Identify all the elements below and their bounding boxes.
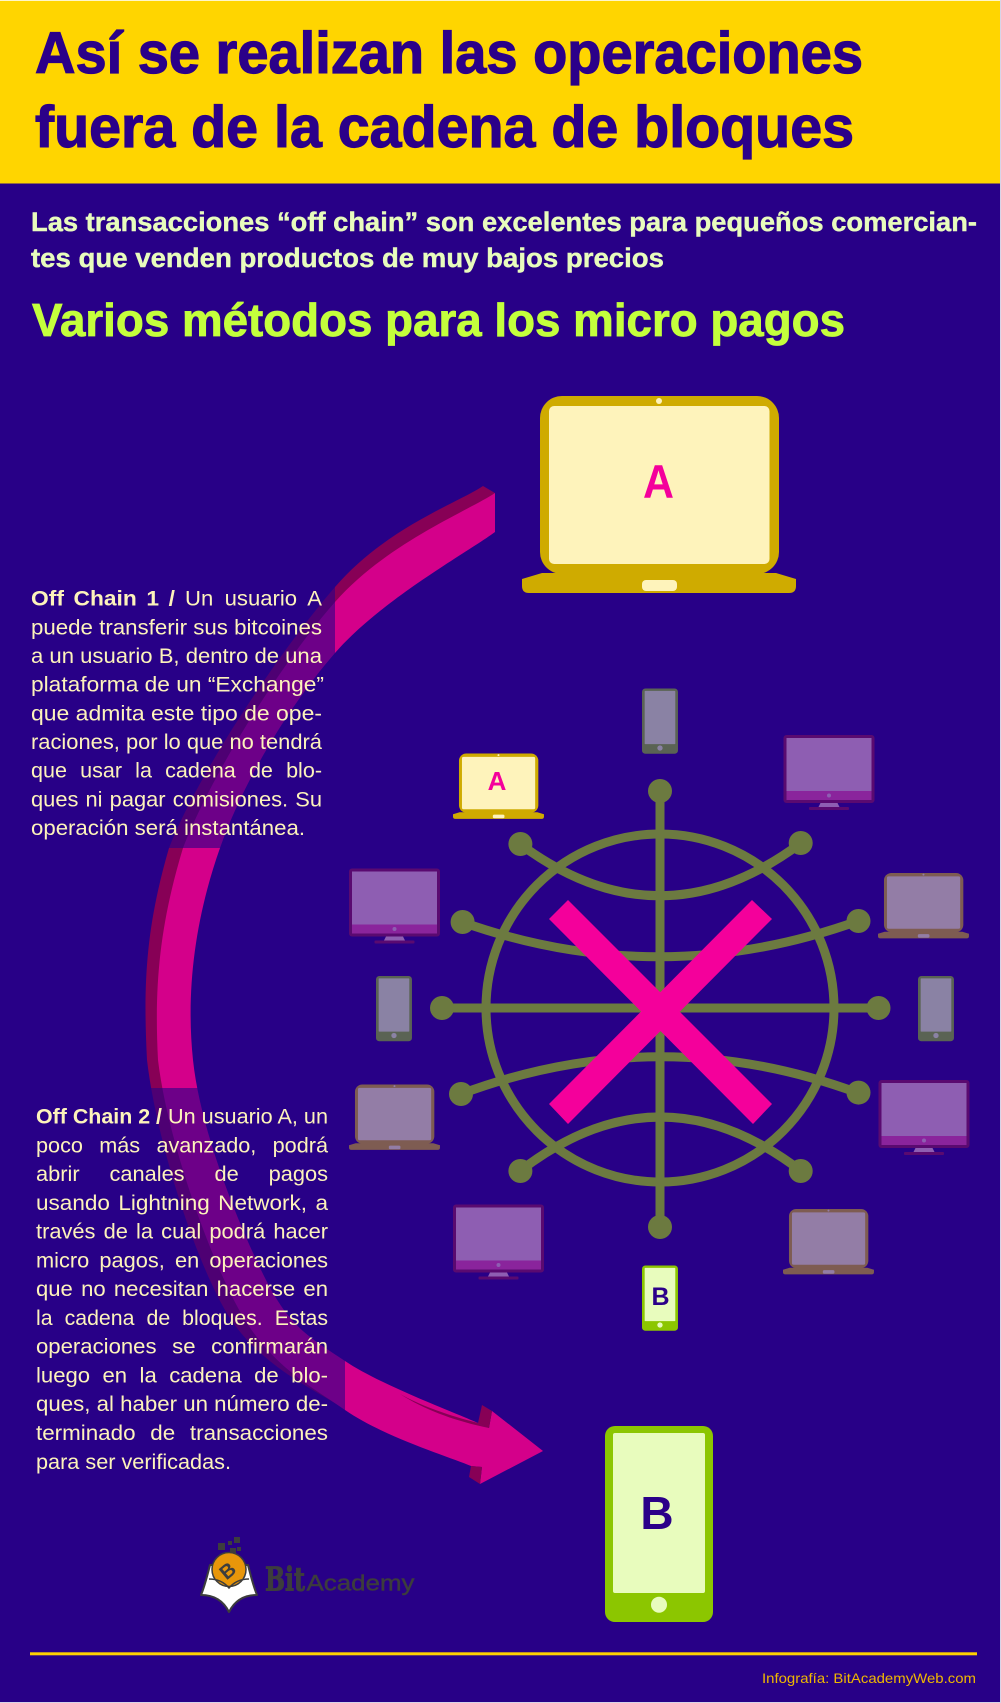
footer credit: Infografía: BitAcademyWeb.com [762, 1670, 976, 1686]
translucent panel behind text 2 [0, 1088, 345, 1428]
icon: large phone B [605, 1426, 713, 1622]
intro text [31, 207, 977, 273]
intro text: tes que venden productos de muy bajos precios [31, 243, 664, 273]
text block: Off Chain 2: ques, al haber un número de- [36, 1393, 328, 1416]
intro text: Las transacciones “off chain” son excelentes para pequeños comercian- [31, 207, 977, 237]
text block: Off Chain 1: raciones, por lo que no tendrá [31, 731, 322, 754]
text block: Off Chain 1: Un usuario A [185, 588, 322, 611]
logo: BitAcademy [201, 1537, 414, 1612]
icon: phone right [918, 976, 954, 1041]
text block: Off Chain 2: terminado de transacciones [36, 1422, 328, 1445]
text block: Off Chain 2: usando Lightning Network, a [36, 1192, 328, 1215]
text block: Off Chain 1: ques ni pagar comisiones. Su [31, 788, 322, 811]
text block: Off Chain 1: que admita este tipo de ope- [31, 702, 322, 725]
title: fuera de la cadena de bloques [35, 95, 854, 160]
logo wordmark: Academy [306, 1571, 414, 1596]
text block: Off Chain 1 [31, 588, 324, 840]
header band [0, 0, 1001, 184]
text block: Off Chain 2: micro pagos, en operaciones [36, 1249, 328, 1272]
icon: monitor top right [784, 735, 874, 810]
title: Así se realizan las operaciones [35, 21, 863, 86]
text block: Off Chain 1: Off Chain 1 / [31, 588, 175, 611]
title [35, 21, 863, 160]
translucent panel behind text 1 [0, 560, 335, 848]
text block: Off Chain 2: operaciones se confirmarán [36, 1336, 328, 1359]
text block: Off Chain 1: a un usuario B, dentro de una [31, 645, 322, 668]
icon: small laptop A: A [488, 766, 507, 796]
footer rule [30, 1652, 977, 1655]
text block: Off Chain 2: poco más avanzado, podrá [36, 1134, 328, 1157]
text block: Off Chain 1: plataforma de un “Exchange” [31, 674, 324, 697]
text block: Off Chain 2: la cadena de bloques. Estas [36, 1307, 328, 1330]
text block: Off Chain 2: que no necesitan hacerse en [36, 1278, 328, 1301]
text block: Off Chain 2: Un usuario A, un [168, 1106, 328, 1128]
icon: pixel squares [218, 1537, 241, 1553]
icon: phone top [642, 688, 678, 754]
icon: pink cross [549, 900, 772, 1124]
arrow: curved path from A to B [146, 486, 543, 1484]
icon: book and coin [201, 1552, 257, 1612]
text block: Off Chain 2: Off Chain 2 / [36, 1106, 162, 1128]
icon: monitor bottom left [453, 1204, 544, 1280]
subheading: Varios métodos para los micro pagos [32, 294, 845, 346]
icon: laptop left lower [349, 1084, 440, 1150]
logo wordmark [265, 1560, 414, 1599]
icon: monitor lower right [878, 1080, 970, 1155]
icon: book and coin: B [216, 1558, 241, 1584]
logo wordmark: Bit [265, 1560, 306, 1599]
text block: Off Chain 2 [36, 1106, 328, 1474]
text block: Off Chain 1: operación será instantánea. [31, 817, 305, 840]
icon: small phone B: B [651, 1283, 670, 1311]
globe network [430, 779, 890, 1239]
icon: small phone B [642, 1266, 678, 1331]
text block: Off Chain 2: través de la cual podrá hacer [36, 1221, 328, 1244]
text block: Off Chain 1: puede transferir sus bitcoines [31, 616, 322, 639]
icon: laptop bottom right [783, 1209, 874, 1274]
icon: laptop right [878, 873, 969, 938]
icon: small laptop A [453, 754, 544, 819]
text block: Off Chain 2: luego en la cadena de blo- [36, 1364, 328, 1387]
icon: phone left [376, 976, 412, 1041]
text block: Off Chain 1: que usar la cadena de blo- [31, 760, 322, 783]
icon: large phone B: B [640, 1487, 674, 1539]
icon: large laptop A: A [643, 455, 674, 508]
icon: large laptop A [522, 396, 796, 593]
text block: Off Chain 2: para ser verificadas. [36, 1451, 231, 1474]
text block: Off Chain 2: abrir canales de pagos [36, 1163, 328, 1186]
icon: monitor left [349, 868, 440, 944]
